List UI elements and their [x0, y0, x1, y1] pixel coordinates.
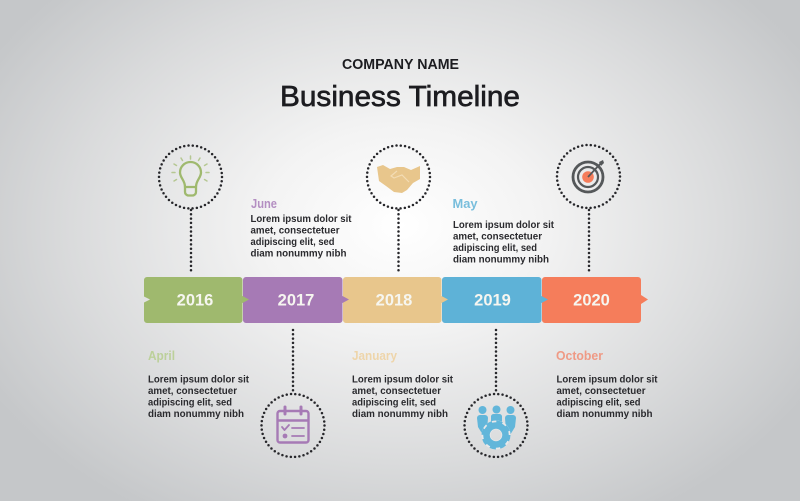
icon circle: target [557, 145, 620, 208]
text block: April: diam nonummy nibh [148, 408, 244, 420]
text block: January: January [352, 349, 397, 363]
segment: 2016: 2016 [177, 292, 213, 310]
icon circle: calendar [262, 394, 324, 457]
text block: January: adipiscing elit, sed [352, 396, 436, 408]
text block: June: June [251, 197, 277, 211]
text block: May: amet, consectetuer [453, 230, 542, 242]
text block: January [352, 349, 453, 420]
text block: June: adipiscing elit, sed [250, 236, 334, 248]
segment: 2018 [343, 277, 448, 323]
connector: 2019 [495, 330, 497, 393]
text block: June: Lorem ipsum dolor sit [250, 213, 352, 225]
text block: May: diam nonummy nibh [453, 254, 549, 266]
text block: June [250, 197, 352, 260]
segment: 2018: 2018 [376, 292, 412, 310]
text block: April: amet, consectetuer [148, 385, 237, 397]
text block: January: Lorem ipsum dolor sit [352, 374, 453, 386]
text block: October: October [556, 349, 603, 363]
text block: October: amet, consectetuer [556, 385, 646, 397]
text block: June: amet, consectetuer [250, 224, 340, 236]
text block: May: adipiscing elit, sed [453, 242, 537, 254]
text block: April: adipiscing elit, sed [148, 396, 232, 408]
text block: June: diam nonummy nibh [250, 248, 346, 260]
text block: April [148, 349, 249, 420]
segment: 2016 [144, 277, 249, 323]
text block: January: amet, consectetuer [352, 385, 441, 397]
text block: January: diam nonummy nibh [352, 408, 448, 420]
timeline bar [144, 277, 648, 323]
icon circle: handshake [367, 146, 430, 208]
segment: 2019 [442, 277, 548, 323]
segment: 2017: 2017 [278, 292, 314, 310]
connector: 2020 [588, 210, 590, 273]
segment: 2020 [542, 277, 648, 323]
title: Business Timeline [280, 81, 520, 113]
text block: October: diam nonummy nibh [556, 408, 652, 420]
segment: 2019: 2019 [474, 292, 511, 310]
segment: 2017 [243, 277, 349, 323]
segment: 2020: 2020 [573, 292, 610, 310]
connector: 2018 [397, 210, 400, 273]
text block: April: Lorem ipsum dolor sit [148, 374, 249, 386]
text block: May [452, 197, 554, 266]
icon circle: team and gear [464, 394, 528, 457]
text block: May: Lorem ipsum dolor sit [453, 219, 554, 231]
connector: 2016 [190, 210, 192, 273]
icon circle: light bulb [159, 146, 222, 208]
text block: May: May [452, 197, 478, 211]
text block: October: adipiscing elit, sed [556, 396, 640, 408]
text block: October [556, 349, 658, 420]
company name: COMPANY NAME [342, 57, 459, 73]
connector: 2017 [292, 330, 294, 393]
text block: October: Lorem ipsum dolor sit [556, 374, 658, 386]
text block: April: April [148, 349, 175, 363]
